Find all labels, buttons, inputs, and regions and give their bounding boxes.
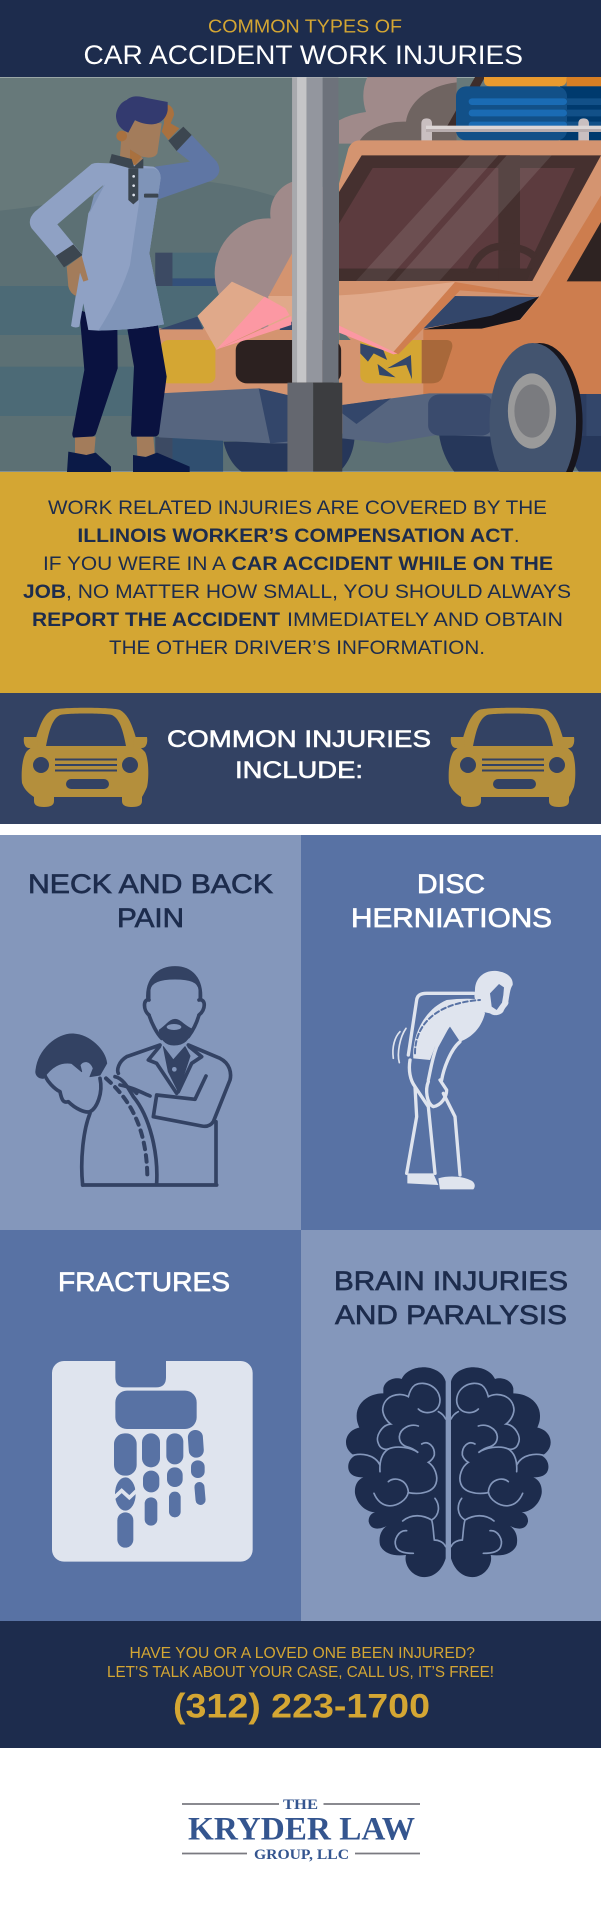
call to action text: HAVE YOU OR A LOVED ONE BEEN INJURED?	[130, 1645, 475, 1662]
panel heading	[334, 1266, 568, 1330]
banner heading: COMMON INJURIES	[167, 726, 431, 753]
intro paragraph: CAR ACCIDENT WHILE ON THE	[232, 553, 553, 575]
panel heading: BRAIN INJURIES	[334, 1266, 568, 1296]
panel: call to action	[0, 1621, 601, 1748]
panel heading: AND PARALYSIS	[335, 1300, 567, 1330]
intro paragraph: .	[514, 525, 519, 547]
panel heading	[351, 869, 552, 933]
intro paragraph: IMMEDIATELY AND OBTAIN	[287, 609, 563, 631]
panel heading: DISC	[417, 869, 485, 899]
panel: fractures	[0, 1230, 301, 1621]
panel: disc herniations	[301, 835, 601, 1230]
icon: man bent over with back pain	[393, 971, 513, 1189]
panel heading: NECK AND BACK	[28, 869, 273, 899]
call to action text: LET’S TALK ABOUT YOUR CASE, CALL US, IT’S FREE!	[107, 1664, 494, 1681]
panel heading	[28, 869, 273, 933]
intro paragraph: WORK RELATED INJURIES ARE COVERED BY THE	[48, 497, 547, 519]
crumpled hood left, bumper and wheels	[159, 282, 601, 472]
panel heading: PAIN	[117, 903, 184, 933]
header kicker: COMMON TYPES OF	[208, 16, 402, 37]
banner heading	[167, 726, 431, 784]
illustration: man beside car crashed into pole	[0, 77, 601, 500]
panel: brain injuries and paralysis	[301, 1230, 601, 1621]
car upper body, smoke, luggage and windshield	[339, 77, 601, 434]
header band	[0, 0, 601, 77]
panel: neck and back pain	[0, 835, 301, 1230]
call to action text	[107, 1645, 494, 1681]
panel heading: FRACTURES	[58, 1267, 230, 1297]
man holding head	[30, 96, 219, 472]
intro paragraph: REPORT THE ACCIDENT	[32, 609, 280, 631]
panel: common injuries banner	[0, 693, 601, 824]
icon: hand x-ray	[52, 1361, 253, 1562]
icon: brain	[346, 1367, 551, 1577]
pole	[287, 77, 342, 472]
intro paragraph: ILLINOIS WORKER’S COMPENSATION ACT	[77, 525, 513, 547]
panel: intro text	[0, 472, 601, 693]
crumpled hood right of pole	[339, 282, 540, 354]
phone number: (312) 223-1700	[173, 1688, 430, 1726]
logo: The Kryder Law Group: KRYDER LAW	[188, 1812, 415, 1848]
scenery background	[0, 77, 601, 472]
logo: The Kryder Law Group: THE	[283, 1797, 318, 1813]
intro paragraph: THE OTHER DRIVER’S INFORMATION.	[109, 637, 485, 659]
intro paragraph: IF YOU WERE IN A	[43, 553, 226, 575]
main title: CAR ACCIDENT WORK INJURIES	[84, 40, 523, 70]
intro paragraph	[23, 497, 571, 659]
panel heading: HERNIATIONS	[351, 903, 552, 933]
icon: doctor examining patient's back	[36, 967, 231, 1185]
car front face	[159, 253, 452, 395]
intro paragraph: , NO MATTER HOW SMALL, YOU SHOULD ALWAYS	[66, 581, 571, 603]
banner heading: INCLUDE:	[235, 757, 363, 784]
logo: The Kryder Law Group: GROUP, LLC	[254, 1847, 349, 1863]
logo: The Kryder Law Group	[182, 1797, 420, 1863]
intro paragraph: JOB	[23, 581, 66, 603]
icon: car left	[22, 708, 148, 807]
icon: car right	[449, 708, 575, 807]
